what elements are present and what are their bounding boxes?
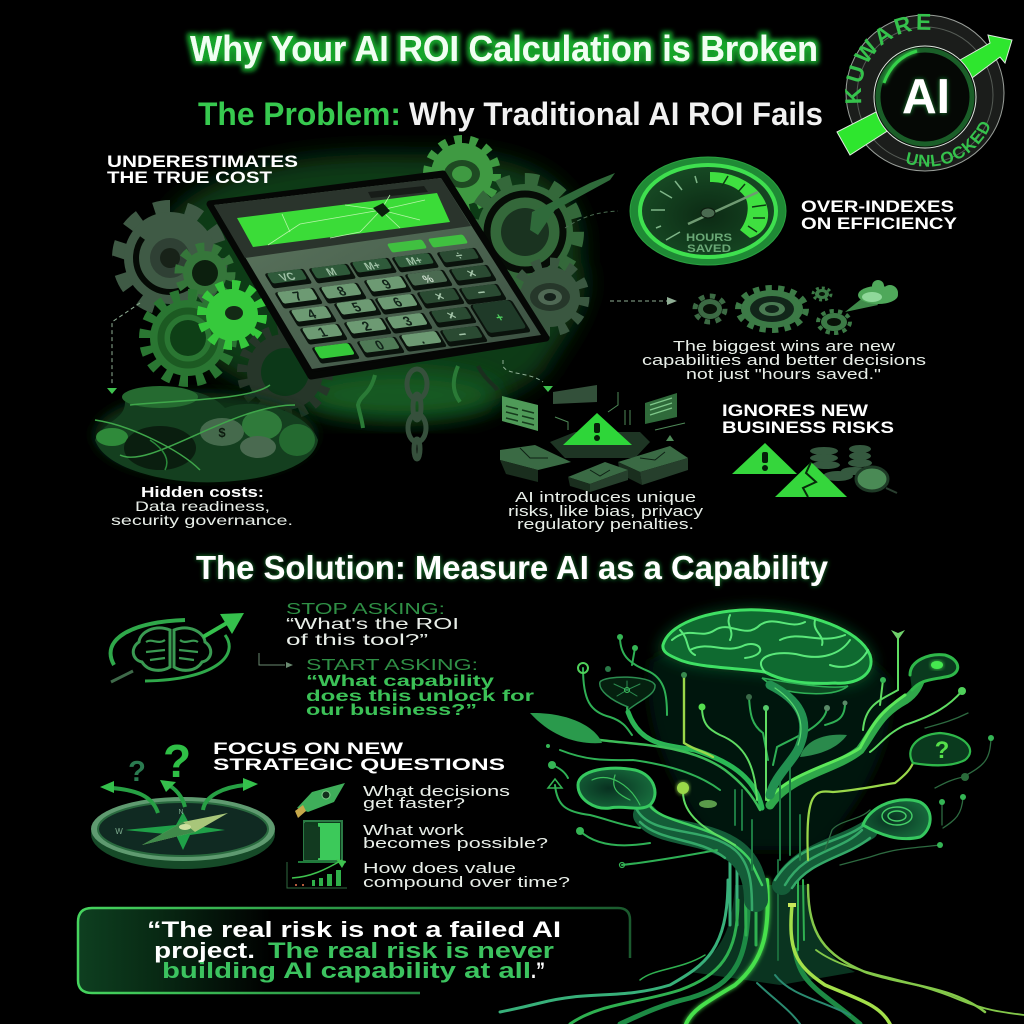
text: AI risks: AI introduces unique xyxy=(515,489,696,506)
icon: compass with question marks: ? xyxy=(128,756,146,788)
icon: warning triangles and coins xyxy=(732,443,897,497)
shard: broken pen xyxy=(530,173,615,235)
text: biggest wins: capabilities and better decisions xyxy=(642,352,926,369)
calculator keys: M+ xyxy=(362,260,384,273)
icon: brain with arrow xyxy=(111,613,244,682)
label: underestimates the true cost: THE TRUE COST xyxy=(107,168,273,187)
callout: quote box: The real risk is never xyxy=(268,938,555,963)
calculator keys: 6 xyxy=(389,294,406,310)
text: start asking xyxy=(306,657,534,719)
text: start asking: does this unlock for xyxy=(306,688,534,705)
heading: the problem xyxy=(198,96,823,132)
label: ignores new business risks: IGNORES NEW xyxy=(722,401,869,420)
icon: cracked risk blocks xyxy=(500,385,688,492)
text: strategic questions list xyxy=(363,784,570,891)
gear: right large xyxy=(473,180,577,284)
calculator keys: VC xyxy=(277,271,298,284)
gear: left small green xyxy=(179,247,231,299)
heading: the problem: Why Traditional AI ROI Fails xyxy=(409,96,823,132)
gear: right lower xyxy=(516,263,584,331)
calculator keys: % xyxy=(420,274,436,286)
text: biggest wins xyxy=(642,338,926,383)
calculator keys: × xyxy=(431,288,447,304)
text: AI risks: risks, like bias, privacy xyxy=(508,503,704,520)
icon: door xyxy=(298,821,346,862)
text: strategic questions list: What work xyxy=(363,823,465,839)
icon: rocket xyxy=(295,783,345,818)
text: start asking: “What capability xyxy=(306,673,494,690)
calculator keys: 9 xyxy=(378,276,395,292)
icon: compass with question marks: ? xyxy=(163,735,191,787)
tree: branch terminals xyxy=(546,630,994,868)
tree: main branches xyxy=(600,670,925,910)
text: hidden costs: Data readiness, xyxy=(135,498,270,514)
label: focus on new strategic questions: FOCUS ON NEW xyxy=(213,739,404,758)
heading: the solution: The Solution: Measure AI as a Capability xyxy=(196,549,829,586)
text: strategic questions list: How does value xyxy=(363,861,516,877)
calculator keys: 0 xyxy=(371,337,388,353)
text: hidden costs xyxy=(111,484,293,528)
vines xyxy=(358,366,497,428)
text: strategic questions list: compound over time? xyxy=(363,875,570,891)
tree: thin circuit branches xyxy=(552,635,991,865)
text: stop asking: STOP ASKING: xyxy=(286,601,445,618)
title: Why Your AI ROI Calculation is Broken xyxy=(190,28,818,69)
gauge: hours saved: SAVED xyxy=(687,243,731,255)
text: stop asking: “What's the ROI xyxy=(286,616,459,633)
text: strategic questions list: becomes possible? xyxy=(363,836,548,852)
gauge: hours saved xyxy=(630,157,786,265)
arrow: dashed to gauge xyxy=(565,211,618,228)
gear: large dark green xyxy=(146,296,230,380)
calculator body xyxy=(210,174,546,376)
calculator keys: − xyxy=(473,284,489,300)
label: underestimates the true cost xyxy=(107,152,298,187)
text: strategic questions list: get faster? xyxy=(363,796,465,812)
tree: brain xyxy=(657,606,876,795)
icon: compass with question marks xyxy=(91,735,275,869)
calculator cracked screen xyxy=(237,193,450,247)
text: AI risks: regulatory penalties. xyxy=(517,516,694,533)
label: over-indexes on efficiency xyxy=(801,197,958,233)
logo: Kuware AI Unlocked badge xyxy=(836,14,1013,172)
text: start asking: our business?” xyxy=(306,702,477,719)
callout: quote box: “The real risk is not a failed AI xyxy=(147,917,561,942)
chain xyxy=(407,369,427,459)
logo: Kuware AI Unlocked badge: AI xyxy=(902,70,950,124)
calculator keys: M xyxy=(324,267,339,279)
calculator keys: M+ xyxy=(404,255,426,268)
calculator keys: 8 xyxy=(333,283,350,299)
text: start asking: START ASKING: xyxy=(306,657,478,674)
text: hidden costs: Hidden costs: xyxy=(141,484,264,501)
text: biggest wins: The biggest wins are new xyxy=(673,338,895,355)
illustration: brain tree xyxy=(500,606,1024,1024)
text: AI risks xyxy=(508,489,704,533)
tree: leaves xyxy=(530,713,847,757)
illustration: broken calculator with gears xyxy=(120,140,615,459)
calculator keys: + xyxy=(492,311,507,324)
text: strategic questions list: What decisions xyxy=(363,784,510,800)
text: hidden costs: security governance. xyxy=(111,512,293,528)
label: over-indexes on efficiency: ON EFFICIENCY xyxy=(801,214,958,233)
gauge: hours saved: HOURS xyxy=(686,232,732,244)
calculator keys: 5 xyxy=(348,299,365,315)
gear: top right bright xyxy=(428,140,496,208)
calculator keys xyxy=(264,234,531,364)
calculator keys: 2 xyxy=(358,318,375,334)
label: ignores new business risks: BUSINESS RISKS xyxy=(722,418,894,437)
callout: quote box: building AI capability at all xyxy=(162,958,531,983)
arrow: to hidden costs xyxy=(107,303,140,394)
tree: side pods xyxy=(578,655,970,839)
icon: growth chart xyxy=(287,859,347,888)
callout: quote box xyxy=(78,908,630,993)
calculator keys: 4 xyxy=(303,306,320,322)
logo: Kuware AI Unlocked badge: KUWARE xyxy=(845,14,930,103)
logo: Kuware AI Unlocked badge: UNLOCKED xyxy=(906,122,990,167)
callout: quote box: project. xyxy=(154,938,255,963)
icon: hidden costs pile: $ xyxy=(218,425,226,440)
calculator keys: − xyxy=(454,326,470,342)
arrow: to gears xyxy=(610,297,677,305)
icon: gears and cloud xyxy=(695,280,898,333)
calculator keys: × xyxy=(463,265,479,281)
gear: lower dark xyxy=(243,330,327,414)
calculator keys: 7 xyxy=(289,288,306,304)
label: underestimates the true cost: UNDERESTIMATES xyxy=(107,152,298,171)
callout: quote box: .” xyxy=(531,958,545,983)
label: focus on new strategic questions xyxy=(213,739,505,774)
label: over-indexes on efficiency: OVER-INDEXES xyxy=(801,197,954,216)
text: biggest wins: not just "hours saved." xyxy=(686,366,881,383)
calculator keys: 3 xyxy=(399,313,416,329)
calculator keys: ÷ xyxy=(452,249,466,262)
icon: compass with question marks: W xyxy=(115,827,123,836)
icon: hidden costs pile xyxy=(95,385,318,482)
tree: side pods: ? xyxy=(935,737,949,764)
arrow: stop to start xyxy=(259,653,293,668)
text: stop asking xyxy=(286,601,459,649)
text: stop asking: of this tool?” xyxy=(286,632,428,649)
icon: compass with question marks: N xyxy=(178,809,184,816)
calculator keys: × xyxy=(443,307,459,323)
heading: the problem: The Problem: xyxy=(198,96,401,132)
label: ignores new business risks xyxy=(722,401,894,437)
gear: left grey xyxy=(120,208,220,308)
calculator keys: 1 xyxy=(314,324,331,340)
gear: bright green xyxy=(202,285,262,345)
calculator keys: . xyxy=(415,331,428,346)
tree: root system xyxy=(500,860,1024,1024)
label: focus on new strategic questions: STRATEGIC QUESTIONS xyxy=(213,755,505,774)
arrow: to risks xyxy=(503,360,553,392)
